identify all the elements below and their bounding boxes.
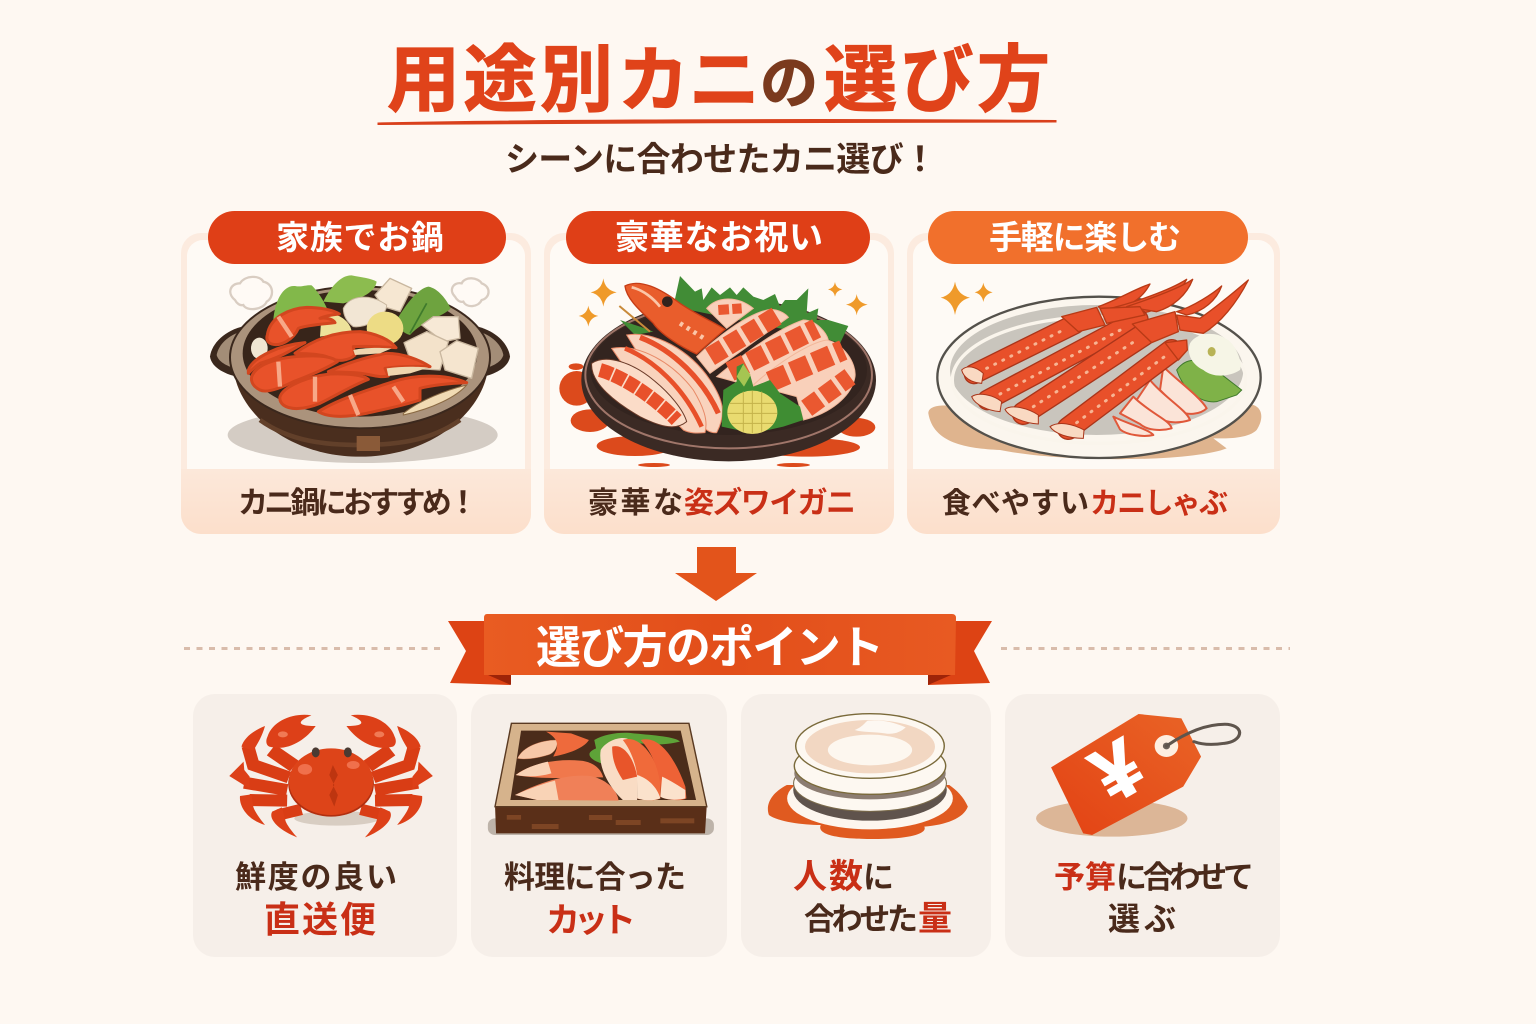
illustration: crab hot pot: [210, 275, 510, 463]
panel: easy enjoyment: [907, 211, 1280, 534]
panel heading pill: 豪華なお祝い: [615, 219, 823, 257]
illustration: crab legs plate: [928, 279, 1261, 459]
card text: [1054, 860, 1254, 937]
caption: カニ鍋におすすめ！: [238, 487, 478, 520]
cut ends: [962, 367, 1084, 438]
panel: luxury celebration: [544, 211, 894, 534]
claws: [248, 307, 467, 416]
panel heading pill: 手軽に楽しむ: [989, 219, 1181, 256]
icon: boxed crab: [488, 723, 714, 835]
panel heading pill: 家族でお鍋: [276, 219, 444, 256]
caption: [942, 487, 1228, 520]
section ribbon: 選び方のポイント: [536, 622, 884, 673]
card text: [235, 860, 397, 940]
section ribbon: [448, 614, 992, 685]
garnish: [1177, 360, 1242, 402]
left slices: [627, 334, 722, 433]
card text: に: [863, 860, 894, 895]
slices: [1113, 367, 1207, 436]
panel heading pill: [208, 211, 506, 264]
tofu and vegetables: [375, 278, 412, 312]
panel heading pill: [566, 211, 870, 264]
card: choose by budget: [1005, 694, 1280, 957]
card text: カット: [546, 902, 636, 940]
card text: 直送便: [264, 899, 376, 940]
card text: 鮮度の良い: [235, 860, 397, 895]
card text: 人数: [793, 858, 863, 896]
card text: 予算: [1054, 860, 1116, 895]
claw tips: [1098, 279, 1248, 333]
title: 選び方: [824, 40, 1050, 121]
card text: 量: [918, 900, 952, 938]
crab legs: [974, 319, 1172, 428]
icon: price tag: [1036, 714, 1240, 837]
card: fresh direct delivery: [193, 694, 457, 957]
icon: stacked plates: [768, 714, 968, 839]
card text: 合わせた: [804, 902, 918, 937]
crab head: [625, 283, 725, 354]
leaves: [273, 285, 328, 320]
subtitle: シーンに合わせたカニ選び！: [505, 141, 937, 179]
dotted divider left: [184, 647, 445, 650]
caption: [588, 486, 856, 520]
title: 用途別: [387, 40, 613, 121]
sparkles: [579, 278, 868, 327]
caption: 豪華な: [588, 487, 683, 520]
title: [387, 40, 1050, 121]
card text: 料理に合った: [504, 860, 686, 895]
icon: crab: [229, 715, 433, 837]
caption: 食べやすい: [942, 487, 1089, 520]
panel: family hot pot: [181, 211, 531, 534]
title: の: [760, 51, 818, 116]
caption: 姿ズワイガニ: [684, 486, 856, 520]
card text: に合わせて: [1116, 860, 1254, 895]
panel heading pill: [928, 211, 1248, 264]
caption: カニしゃぶ: [1090, 488, 1228, 520]
card: cut for cooking: [471, 694, 727, 957]
card text: [504, 860, 686, 940]
illustration: luxury crab platter: [559, 276, 876, 467]
right segments: [697, 299, 855, 420]
title: カニ: [618, 42, 760, 121]
card: amount for party: [741, 694, 991, 957]
arrow: [675, 547, 757, 601]
card text: 選ぶ: [1108, 901, 1176, 937]
card text: [793, 858, 952, 938]
dotted divider right: [1001, 647, 1290, 650]
garnish: [722, 363, 803, 433]
icon: price tag: ¥: [1077, 721, 1159, 820]
title underline: [378, 120, 1056, 124]
